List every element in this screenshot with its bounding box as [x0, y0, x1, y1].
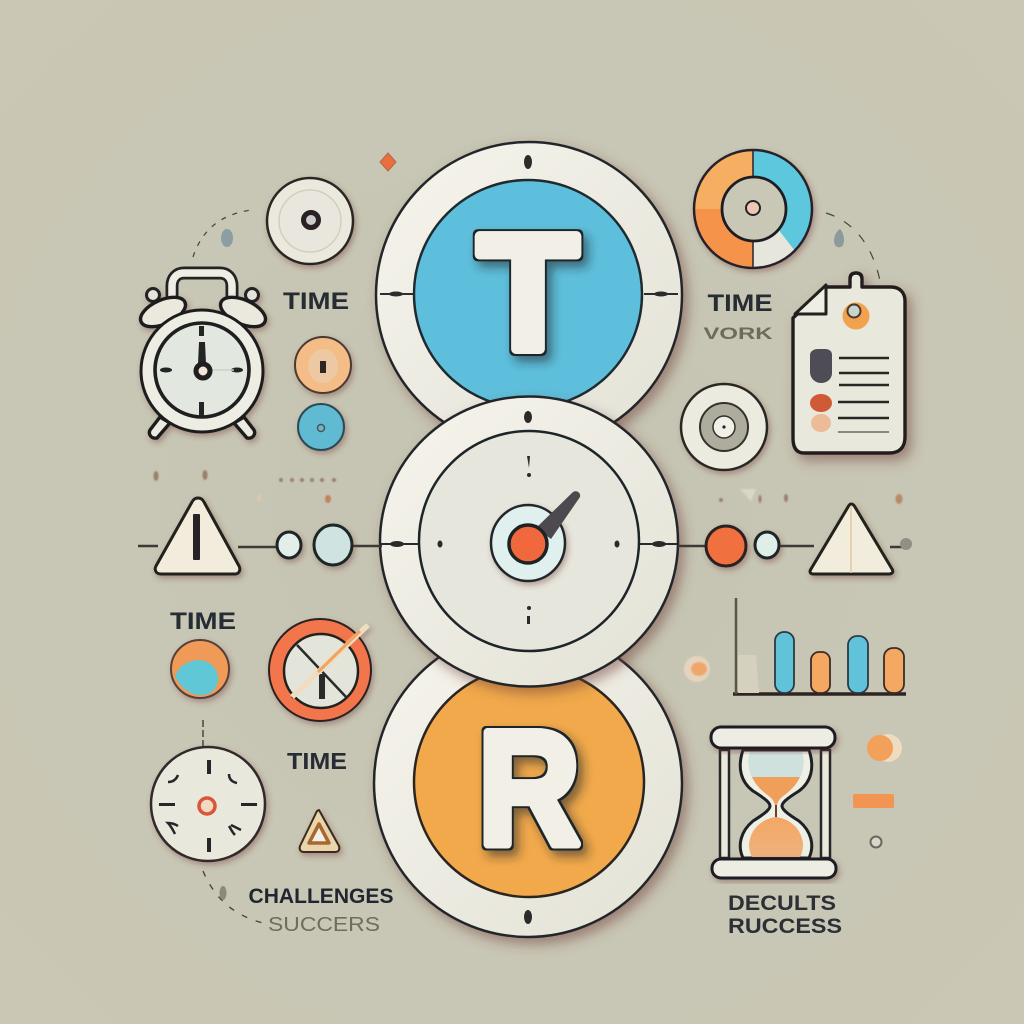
icon: target dial right: [681, 384, 767, 470]
dashed arc right: [826, 213, 880, 281]
drop lower left: [220, 886, 226, 900]
label: TIME lower: TIME: [287, 748, 347, 774]
icon: small triangle: [300, 810, 339, 852]
label: WORK: VORK: [704, 324, 774, 343]
faint dash under TIME: [289, 786, 347, 788]
icon: peach button: [295, 337, 351, 393]
icon: blue button: [298, 404, 344, 450]
drop left: [221, 229, 233, 247]
faint dash: [715, 357, 737, 359]
diamond accent: [380, 153, 396, 171]
panel: R ring: [374, 629, 682, 937]
panel: middle clock ring: [380, 396, 678, 686]
node small: [277, 532, 301, 558]
icon: orange coin: [867, 734, 902, 762]
bar chart: [733, 598, 906, 694]
timeline left: [138, 498, 382, 574]
node pale: [755, 532, 779, 558]
R ring tick: [524, 910, 532, 924]
icon: top left dial: [267, 178, 353, 264]
icon: dial with ticks: [151, 747, 265, 861]
icon: small grey dot: [870, 836, 882, 848]
node large: [314, 525, 352, 565]
end dot: [900, 538, 912, 550]
T colour disc: [414, 180, 642, 408]
R colour disc: [414, 667, 644, 897]
dashed arc left: [193, 210, 251, 257]
clock hand: [536, 491, 580, 539]
letter T: T: [478, 201, 578, 384]
ticks: [381, 411, 677, 624]
orange hub: [509, 525, 547, 563]
label: TIME top left: TIME: [283, 288, 349, 315]
label: CHALLENGES: CHALLENGES: [248, 885, 394, 908]
icon: orange teal ball: [171, 640, 229, 698]
label: SUCCERS: SUCCERS: [268, 914, 380, 936]
label: SUCCESS: RUCCESS: [728, 915, 842, 938]
icon: no-clock sign: [269, 619, 371, 721]
icon: donut chart: [694, 150, 813, 269]
letter R: R: [478, 698, 580, 879]
faint specks right: [719, 489, 902, 504]
panel: T ring: [376, 142, 682, 448]
timeline right: [678, 504, 912, 574]
icon: pin above dial: [202, 720, 204, 747]
icon: alarm clock: [136, 273, 270, 438]
clock face: [419, 431, 639, 651]
label: TIME mid left: TIME: [170, 608, 236, 635]
drop right: [834, 229, 844, 247]
dashed arc lower left: [203, 871, 263, 923]
icon: hourglass: [711, 727, 836, 878]
label: TIME top right: TIME: [708, 290, 772, 317]
label: RESULTS: DECULTS: [728, 892, 836, 915]
T ring ticks: [380, 155, 678, 296]
icon: orange bar: [853, 794, 894, 808]
warning triangle left: [155, 498, 240, 574]
icon: faint orange dot: [684, 656, 710, 682]
node orange: [706, 526, 746, 566]
icon: document clipboard: [793, 273, 905, 453]
triangle right: [810, 504, 893, 574]
faint specks left: [154, 470, 336, 503]
clock hub: [491, 505, 565, 581]
